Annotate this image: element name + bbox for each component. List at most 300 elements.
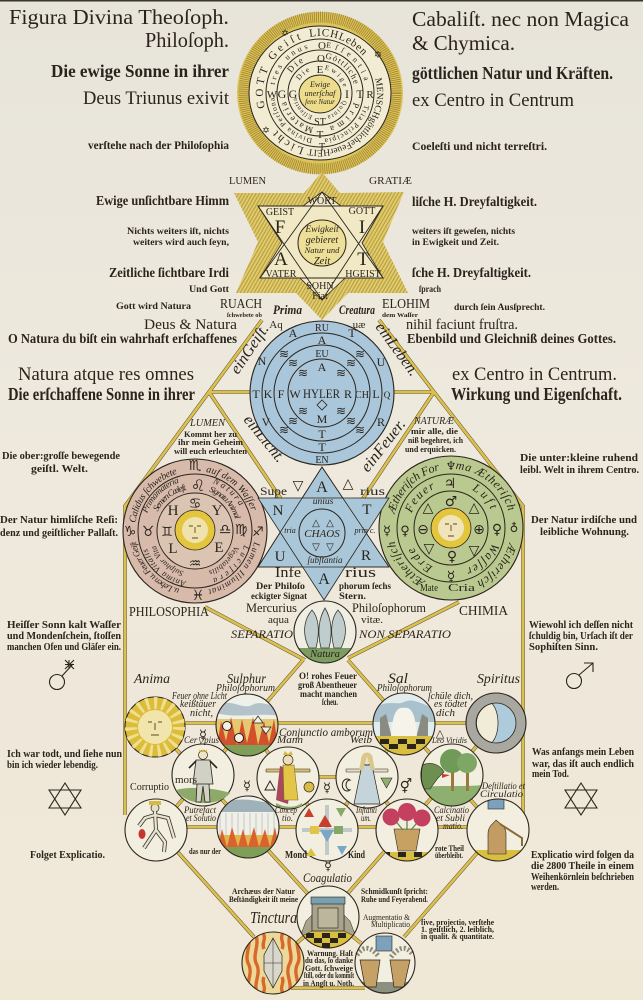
chaos letters: CHAOS (304, 528, 340, 540)
mid text: Ruach and Elohim: RUACH (220, 297, 262, 312)
mercurius labels (246, 600, 426, 626)
sun ring inscriptions: Ewige (324, 65, 346, 87)
labels: lower tree upper row: Anima (133, 672, 170, 687)
labels: lower tree middle row: Corruptio (130, 781, 169, 793)
hyle water signs: ≋ (336, 366, 346, 380)
sun ring inscriptions: LICHLeben (309, 28, 366, 56)
hexagram labels: Fiat (312, 291, 328, 302)
naturae text block (405, 415, 464, 454)
lumen text block: ihr mein Geheim (178, 438, 243, 447)
rotated line labels: einFeuer. (358, 416, 409, 475)
mid text: Ruach and Elohim: ELOHIM (382, 297, 430, 312)
labels: lower tree bottom row: Coagulatio (303, 870, 352, 885)
green planet and element signs: △ (469, 500, 480, 516)
hyle water signs: ≋ (279, 347, 289, 361)
small alchemical signs above circles: ☿ (243, 779, 251, 794)
labels: lower tree upper row: ſchüle dich, (428, 690, 473, 702)
emblem: spiritus moon (466, 693, 526, 753)
hyle letters: T (252, 387, 260, 401)
superius inferius labels: Infe (275, 565, 301, 581)
pink zodiac signs: ♒︎ (189, 556, 201, 572)
hyle letters: R (377, 415, 385, 429)
labels: lower tree bottom row: ſtill, oder du kommſt (304, 971, 354, 980)
sun ring small triangles (262, 29, 382, 136)
hyle water signs: ≋ (288, 356, 298, 370)
mid text: Ruach and Elohim: Prima (273, 302, 302, 317)
sun centre inscription (305, 80, 337, 106)
labels: lower tree middle row: et Solutio (186, 814, 216, 824)
emblem: skeleton (125, 799, 187, 861)
pink ring inscriptions: Semen Cœleſt. (154, 484, 186, 512)
labels: lower tree bottom row: Gott. ſchweige (305, 964, 353, 973)
emblem: natura circle (294, 601, 356, 664)
hexagram labels: A (274, 249, 288, 270)
emblem: hexagram of trinity (234, 172, 408, 320)
pink ring inscriptions: Vegetabilis (209, 548, 239, 574)
green planet and element signs: ☿ (383, 524, 391, 539)
green planet and element signs: ▽ (469, 543, 480, 559)
green planet and element signs: △ (423, 500, 434, 516)
sun cross letters: T (317, 129, 324, 141)
labels: lower tree middle row: matio. (443, 822, 463, 832)
hyle letters: W (289, 387, 301, 401)
LUMEN GRATIAE labels: GRATIÆ (369, 176, 412, 187)
green planet and element signs: ⊕ (473, 522, 485, 538)
labels: lower tree upper row: nicht, (190, 708, 213, 719)
labels: lower tree middle row: Putrefact (183, 805, 216, 816)
side text lower right: werden. (531, 882, 559, 893)
sun ring inscriptions: Divina Perſona (270, 98, 312, 144)
emblem: eternal sun (237, 12, 403, 174)
pink zodiac signs: ♉︎ (142, 524, 154, 540)
emblem: pink celestial circle (122, 458, 268, 604)
star left (49, 783, 81, 815)
hyle letters: A (318, 360, 327, 374)
chaos letters: tria (284, 526, 296, 535)
signat text: Der Philoſo (256, 582, 305, 592)
superius inferius labels (260, 484, 385, 581)
side text: Trinity left: Und Gott (189, 285, 230, 295)
chaos letters: △ (343, 476, 354, 492)
hyle letters: A (289, 326, 298, 340)
pink zodiac signs: ♏︎ (189, 458, 202, 474)
hyle letters: Aq (269, 319, 283, 331)
side text: world labels left: denz und geiſtlicher Pallaſt. (0, 527, 118, 539)
emblem: mors figure (172, 744, 234, 806)
side text: world labels right: ſchuldig bin, Urſach iſt der (529, 631, 634, 642)
sun cross letters: O (318, 40, 326, 52)
green planet and element signs: ♂ (445, 494, 457, 510)
star right (565, 783, 597, 815)
labels: lower tree upper row: dich (436, 707, 455, 719)
labels: lower tree bottom row: 1. geiſtlich, 2. leiblich, (421, 925, 494, 934)
mid text: Ruach and Elohim: Natura atque res omnes (18, 364, 194, 385)
green ring inscriptions: Feuer (404, 483, 433, 514)
side text lower right: mein Tod. (532, 769, 569, 780)
labels: lower tree middle row: Concep (275, 806, 297, 816)
hyle letters: EN (315, 455, 329, 466)
green ring inscriptions: Mate (420, 583, 438, 594)
hyle letters: K (264, 387, 273, 401)
labels: lower tree middle row: Conjunctio amborum (279, 725, 373, 739)
sun cross letters (267, 40, 374, 153)
title block left (9, 5, 230, 152)
mercury glyph left (50, 660, 74, 690)
title block right: Cabaliſt. nec non Magica (412, 7, 630, 31)
side text: Trinity right (412, 195, 537, 295)
labels: lower tree bottom row: Kind (348, 850, 365, 861)
labels: lower tree upper row: es tödtet (434, 698, 468, 710)
sun ring inscriptions: Eſſentia (294, 98, 312, 120)
lumen text block: will euch erleuchten (174, 447, 248, 456)
green planet and element signs: ♁ (510, 521, 518, 535)
side text: Trinity right: ſche H. Dreyfaltigkeit. (412, 266, 531, 281)
emblem: blue hyle circle (250, 319, 394, 466)
naturae text block: NATURÆ (413, 415, 454, 427)
hyle letters: M (317, 412, 328, 426)
hexagram labels (266, 196, 381, 302)
pink ring inscriptions: Sulphur Vita (152, 546, 184, 576)
chaos letters: prin c. (354, 526, 375, 535)
rotated line labels: einLicht. (240, 412, 288, 466)
labels: lower tree upper row: macht manchen (300, 690, 358, 700)
sun ring small triangles: ✡ (281, 29, 289, 39)
green planet and element signs: ♀ (492, 522, 502, 538)
hyle letters: CH (355, 390, 369, 401)
sun ring inscriptions: Die (286, 59, 304, 73)
title block left: Figura Divina Theoſoph. (9, 5, 229, 29)
labels: lower tree upper row: Sal (388, 671, 408, 687)
title block right: Coeleſti und nicht terreſtri. (412, 141, 547, 153)
hyle letters: R (344, 387, 352, 401)
emblem: mann figure (257, 747, 319, 809)
chaos letters: ▽ (293, 478, 304, 494)
sun ring inscriptions: Materia (282, 102, 314, 134)
hexagram labels: SOHN (306, 281, 334, 292)
labels: lower tree bottom row: five, projectio, verſtehe (421, 918, 494, 927)
hyle water signs: ≋ (355, 347, 365, 361)
side text: world labels left: Die ober:groſſe bewegende (2, 450, 120, 462)
hyle letters: A (318, 333, 327, 347)
side text: Trinity left: weiters wird auch ſeyn, (133, 238, 230, 248)
side text: world labels left: und Mondenſchein, ſtoſſen (7, 631, 121, 642)
labels: lower tree upper row: Sulphur (227, 672, 266, 687)
sun cross letters: ST (314, 117, 326, 128)
sun ring inscriptions: GOTT Geiſt (256, 34, 301, 108)
philosophia chimia separatio labels (129, 603, 508, 641)
labels: lower tree bottom row: rote Theil (435, 844, 465, 853)
green planet and element signs: ♃ (444, 476, 456, 492)
sun cross letters: T (356, 87, 364, 101)
green central sun (431, 508, 471, 548)
labels: lower tree upper row: ſcheu. (322, 698, 338, 708)
chaos letters: △ (326, 518, 334, 529)
labels: lower tree upper row: O! rohes Feuer (299, 672, 358, 682)
hyle letters: uæ (353, 319, 365, 331)
emblem: tinctura fire (242, 932, 304, 994)
mercurius labels: vitæ. (361, 614, 383, 626)
mid text: Ruach and Elohim: Gott wird Natura (116, 302, 191, 312)
labels: lower tree middle row (130, 725, 525, 832)
pink zodiac signs: ♌︎ (191, 476, 205, 495)
title block left: verſtehe nach der Philoſophia (88, 140, 229, 152)
side text lower left: Folget Explicatio. (30, 849, 105, 861)
side text: world labels right: Wiewohl ich deſſen nicht (529, 620, 634, 631)
green planet and element signs: ♆ (446, 459, 456, 473)
hexagram labels: Zeit (314, 256, 331, 267)
sun ring inscriptions: Quinta (327, 100, 346, 118)
side text lower left: Ich war todt, und ſiehe nun (7, 749, 122, 760)
side text: world labels left (0, 450, 122, 653)
side text: Trinity right: in Ewigkeit und Zeit. (412, 238, 499, 248)
hexagram labels: VATER (266, 269, 297, 280)
sun cross letters: E (317, 64, 324, 76)
emblem: anima sun (125, 697, 185, 757)
title block left: Deus Triunus exivit (83, 89, 230, 109)
labels: lower tree middle row: Cer▽pius (184, 735, 219, 745)
side text: world labels left: Heiſſer Sonn kalt Waſſer (7, 620, 122, 631)
hyle letters: N (258, 354, 267, 368)
sun ring inscriptions: tres unus (270, 45, 308, 84)
emblem: distillation still (467, 799, 529, 861)
side text: Trinity right: liſche H. Dreyfaltigkeit. (412, 195, 537, 210)
mid text: Ruach and Elohim: O Natura du biſt ein wahrhaft erſchaffenes (8, 331, 237, 346)
labels: lower tree bottom row: Multiplicatio (371, 920, 410, 929)
mid text: Ruach and Elohim: Deus & Natura (144, 317, 237, 333)
superius inferius labels: Supe (260, 484, 287, 498)
superius inferius labels: rius (360, 484, 385, 498)
labels: lower tree upper row (133, 671, 521, 719)
labels: lower tree bottom row: Warnung. Haſt (307, 949, 353, 958)
side text lower left: bin ich wieder lebendig. (7, 760, 98, 771)
side text lower right (531, 747, 635, 893)
mid text: Ruach and Elohim: nihil faciunt fruſtra. (406, 317, 518, 333)
title block left: Die ewige Sonne in ihrer (51, 61, 229, 81)
side text: Trinity left: Ewige unſichtbare Himm (96, 194, 229, 209)
chaos letters: U (275, 549, 286, 565)
labels: lower tree bottom row: Archæus der Natur (232, 887, 295, 896)
mid text: Ruach and Elohim: ſchwebete ob (227, 312, 262, 319)
side text lower left (7, 749, 122, 861)
sun ring inscriptions (256, 28, 384, 156)
frame: yellow structural lines (125, 320, 523, 988)
pink ring inscriptions: auf dem Waſſer (206, 468, 256, 510)
pink zodiac signs: ♓︎ (192, 588, 204, 604)
signat text: Stern. (339, 592, 366, 602)
philosophia chimia separatio labels: SEPARATIO (231, 627, 293, 641)
pink zodiac signs (124, 458, 264, 604)
emblem: chaos hexagram (258, 467, 389, 600)
mid text: Ruach and Elohim: Ebenbild und Gleichniß deines Gottes. (407, 331, 616, 346)
emblem: green terrestrial circle (378, 456, 524, 600)
sun centre inscription: Ewige (309, 80, 330, 89)
pink zodiac signs: ♍︎ (235, 522, 247, 538)
title block right: & Chymica. (412, 31, 515, 55)
chaos letters: ▽ (326, 542, 334, 553)
pink zodiac signs: ♐︎ (252, 525, 264, 540)
side text: Trinity right: ſprach (419, 285, 442, 295)
superius inferius labels: rius (345, 565, 376, 581)
green ring inscriptions: Cria (448, 582, 475, 594)
sun ring inscriptions: MENSCHgöttlicheFeuerHEIT (307, 78, 384, 156)
emblem: conception diagram (296, 799, 358, 861)
sun cross letters: W (267, 89, 278, 101)
labels: lower tree middle row: Weib (350, 735, 372, 746)
sun cross letters: T (319, 142, 325, 153)
hexagram labels: I (359, 217, 365, 238)
side text: world labels right (520, 452, 639, 653)
side text: world labels left: geiſtl. Welt. (31, 463, 88, 475)
green ring inscriptions: Luft (472, 484, 496, 510)
labels: lower tree bottom row: in Angſt u. Noth. (303, 979, 354, 988)
mercurius labels: Philoſophorum (352, 600, 426, 615)
hyle letters: HYLER (303, 386, 340, 401)
green ring inscriptions: Ætheriſch (477, 542, 516, 588)
hyle letters: T (348, 326, 356, 340)
emblem: weib figure (336, 746, 398, 808)
sun ring inscriptions: Prima (330, 102, 360, 130)
pink ring inscriptions: Natura (212, 478, 243, 506)
hexagram labels: GOTT (349, 206, 375, 217)
mid text: Ruach and Elohim: durch ſein Ausſprecht. (454, 303, 545, 313)
mid text: Ruach and Elohim: ex Centro in Centrum. (452, 364, 617, 385)
hexagram labels: WORT (308, 196, 336, 207)
signat text (251, 582, 391, 602)
side symbols right (566, 663, 593, 688)
pink ring inscriptions: Lumen Illuminat (208, 542, 260, 594)
labels: lower tree bottom row: das nur der (189, 847, 221, 856)
labels: lower tree bottom row: Mond (285, 850, 307, 861)
emblem: sulphur fire (216, 694, 278, 756)
sun cross letters: I (345, 87, 349, 101)
chaos letters: unius (313, 497, 334, 507)
hyle letters: V (262, 415, 271, 429)
green ring inscriptions: ma Ætheriſch (456, 464, 516, 511)
sun ring inscriptions: Tria Principia (324, 106, 370, 143)
hyle letters: U (377, 355, 386, 369)
chaos letters: ſubſtantia (307, 555, 343, 565)
hyle water signs: ≋ (355, 423, 365, 437)
hexagram labels: T (357, 249, 369, 270)
labels: lower tree middle row: Deſtillatio et (481, 781, 525, 792)
naturae text block: mir alle, die (411, 427, 459, 436)
chaos letters: T (362, 502, 372, 518)
small alchemical signs above circles: ☿ (324, 859, 332, 874)
green ring inscriptions: Ætheriſch (387, 542, 426, 586)
labels: lower tree bottom row: Beſtändigkeit iſt meine (229, 895, 298, 904)
labels: lower tree upper row: keißtäuer (180, 699, 216, 710)
sun ring inscriptions: Licht (273, 130, 304, 154)
labels: lower tree middle row: Mann (276, 735, 303, 746)
emblem: flowers in pot (376, 799, 438, 861)
LUMEN GRATIAE labels (229, 176, 412, 187)
sun ring small triangles: ✡ (262, 126, 270, 136)
hexagram labels: gebieret (306, 235, 338, 246)
mid text: Ruach and Elohim: dem Waſſer (382, 312, 418, 319)
hyle letters: F (278, 387, 285, 401)
sun cross letters: G (289, 87, 298, 101)
side text: world labels right: Der Natur irdiſche und (531, 514, 637, 526)
mid text: Ruach and Elohim (8, 297, 622, 404)
labels: lower tree bottom row: überbleibt. (435, 851, 463, 860)
side text lower right: war, das iſt auch endlich (532, 759, 634, 770)
pink HYLE letters: E (214, 540, 224, 556)
labels: lower tree middle row: Inſtanti (355, 805, 377, 816)
emblem: fire below clouds (217, 796, 279, 858)
philosophia chimia separatio labels: CHIMIA (459, 603, 508, 618)
pink HYLE letters: Y (212, 503, 223, 519)
naturae text block: und erquicken. (405, 445, 456, 454)
chaos letters: △ (312, 518, 320, 529)
title block right (412, 7, 630, 153)
sun ring inscriptions: Die (296, 68, 310, 80)
emblem: furnace (297, 886, 359, 948)
title block right: göttlichen Natur und Kräften. (412, 63, 613, 83)
hexagram labels: HGEIST (345, 269, 381, 280)
small alchemical signs above circles: ☿ (323, 781, 331, 796)
side text lower right: Explicatio wird folgen da (531, 850, 635, 861)
hyle letters: EU (315, 349, 329, 360)
sun cross letters: R (366, 89, 374, 101)
labels: lower tree middle row: tio. (282, 814, 293, 824)
emblem: augmentation vessels (354, 932, 416, 994)
small alchemical signs above circles (199, 727, 445, 874)
labels: lower tree middle row: Circulatio (480, 790, 523, 800)
hyle diamond (317, 400, 327, 410)
mid text: Ruach and Elohim: Die erſchaffene Sonne in ihrer (8, 384, 195, 404)
hexagram labels: Ewigkeit (304, 225, 339, 235)
side text: world labels right: Sophiſten Sinn. (529, 642, 599, 653)
labels: lower tree bottom row (189, 844, 494, 988)
green planet and element signs: ⊖ (417, 522, 429, 538)
lumen text block: Kommt her zu (184, 430, 238, 439)
hyle letters: RU (315, 323, 330, 334)
hyle letters: L (372, 387, 380, 401)
lumen text block: LUMEN (189, 417, 226, 429)
labels: lower tree middle row: um. (361, 814, 371, 824)
sun ring small triangles: ✡ (374, 50, 382, 61)
sun centre inscription: fene Natur (305, 98, 335, 106)
pink zodiac signs: ♋︎ (189, 496, 201, 512)
mid text: Ruach and Elohim: Creatura (339, 302, 375, 317)
rotated line labels: einLeben. (372, 319, 422, 380)
labels: lower tree middle row: Calcinatio (434, 806, 469, 816)
side text: world labels right: Die unter:kleine ruhend (520, 452, 638, 464)
small alchemical signs above circles: △ (436, 727, 445, 740)
chaos letters: A (316, 479, 328, 496)
sun cross letters: G (278, 87, 287, 101)
labels: lower tree upper row: Spiritus (477, 672, 521, 687)
hyle water signs: ≋ (346, 414, 356, 428)
labels: lower tree bottom row: Schmidkunſt ſpricht: (361, 887, 428, 896)
green planet and element signs: ♀ (447, 549, 457, 565)
labels: lower tree middle row: Leo Viridis (431, 735, 468, 745)
pink HYLE letters (168, 503, 224, 557)
hyle water signs (279, 347, 365, 437)
side symbols left (50, 660, 74, 690)
sun cross letters: O (317, 53, 325, 65)
pink HYLE letters: L (168, 541, 178, 557)
pink central sun (175, 510, 215, 550)
hyle letters (252, 319, 391, 466)
chaos letters (273, 476, 375, 588)
labels: lower tree upper row: Philoſophorum (376, 683, 432, 694)
emblem: mors figure: mors (175, 774, 197, 786)
pink ring inscriptions (130, 468, 260, 594)
sun ring inscriptions: Eſſentia (326, 42, 368, 81)
mars glyph right (566, 663, 593, 688)
labels: lower tree bottom row: in qualit. & quantitate. (421, 932, 494, 941)
